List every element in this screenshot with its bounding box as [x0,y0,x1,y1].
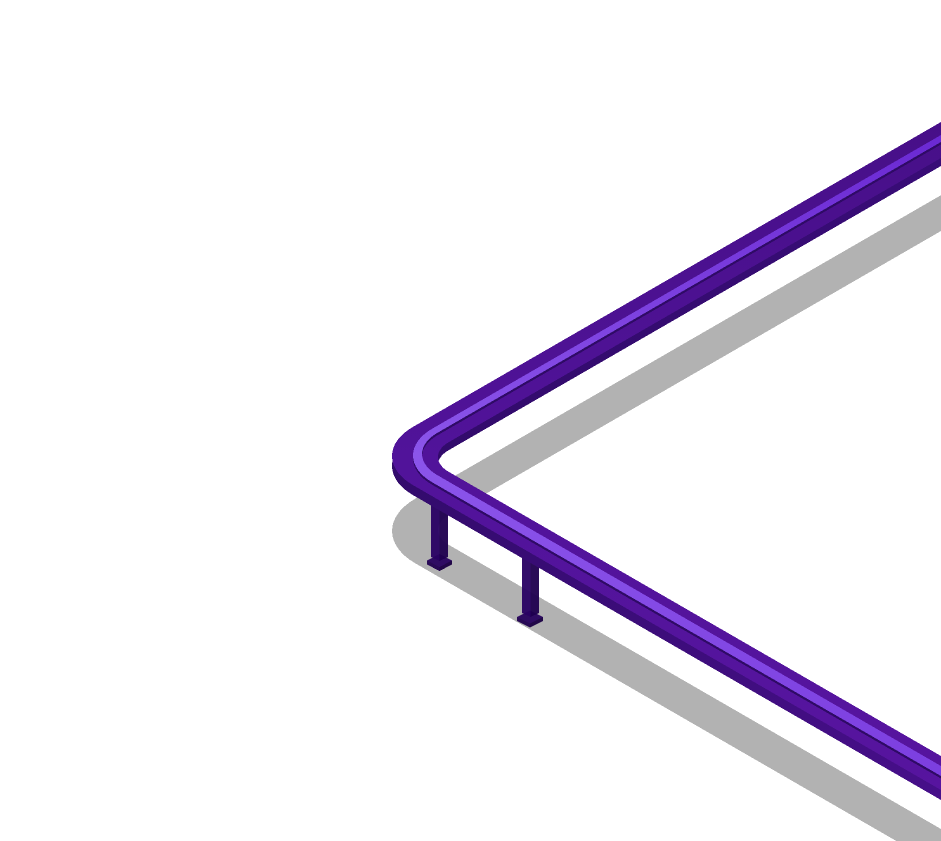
leg 1 base [427,554,452,571]
support leg 1 [431,500,448,561]
leg 2 base [517,610,543,628]
inner rail wall [413,138,941,778]
support leg 2 [522,550,539,617]
rail side faces [392,132,941,800]
rail top surface [392,122,941,790]
inner rail highlight band [413,135,941,776]
ground shadow [392,195,941,841]
